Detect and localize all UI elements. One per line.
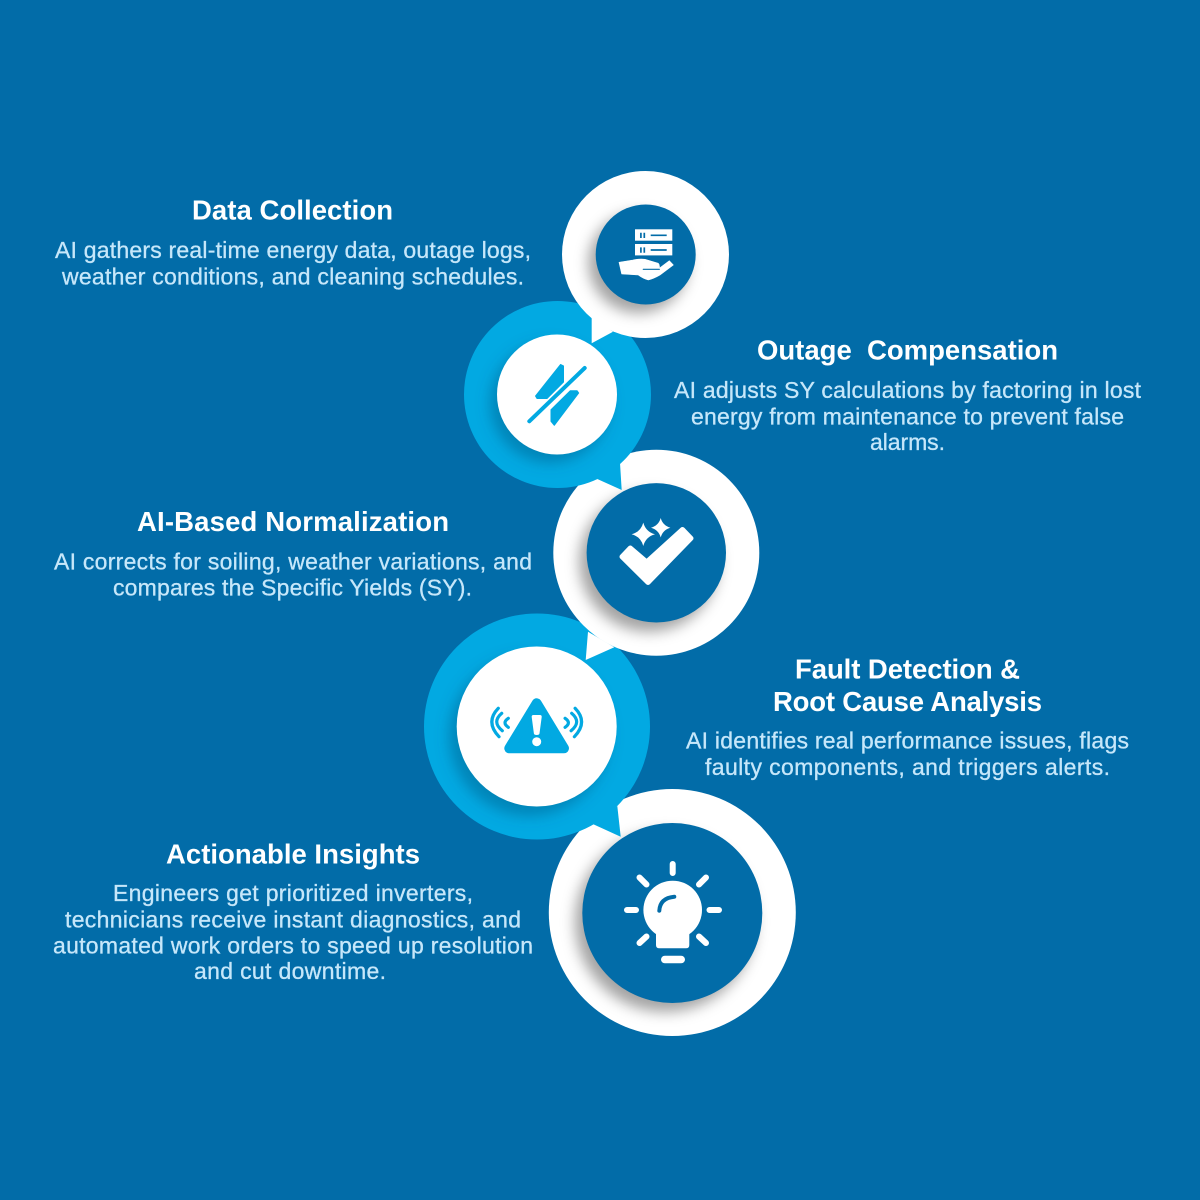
body: AI-based normalization: AI corrects for soiling, weather variations, and	[54, 548, 532, 574]
icon: check mark with sparkles	[622, 518, 691, 582]
speech tail pointing to step 3	[597, 463, 622, 490]
text block: data collection	[55, 194, 531, 289]
text block: AI-based normalization	[54, 506, 532, 601]
step 1 circle: data collection	[562, 171, 729, 343]
body: outage compensation: AI adjusts SY calculations by factoring in lost	[674, 377, 1142, 403]
body: data collection: AI gathers real-time energy data, outage logs,	[55, 237, 531, 263]
body: outage compensation: alarms.	[870, 429, 945, 455]
body: data collection: weather conditions, and cleaning schedules.	[61, 263, 524, 289]
body: fault detection: faulty components, and triggers alerts.	[705, 754, 1110, 780]
heading: fault detection and root cause analysis: Root Cause Analysis	[773, 686, 1042, 717]
heading: fault detection and root cause analysis	[773, 654, 1042, 717]
speech tail pointing to step 4	[586, 632, 614, 660]
speech tail pointing to step 5	[593, 806, 621, 837]
icon: lightning bolt crossed out	[529, 364, 585, 425]
body: AI-based normalization: compares the Specific Yields (SY).	[113, 575, 472, 601]
icon: servers on open hand	[619, 229, 673, 280]
heading: fault detection and root cause analysis: Fault Detection &	[795, 654, 1020, 684]
infographic canvas	[54, 171, 1141, 1036]
step 4 circle: fault detection	[424, 614, 650, 840]
step 3 circle: AI-based normalization	[553, 450, 759, 660]
heading: data collection: Data Collection	[192, 194, 393, 225]
step 5 circle: actionable insights	[549, 789, 796, 1036]
text block: outage compensation	[674, 334, 1142, 455]
heading: outage compensation: Outage Compensation	[757, 334, 1058, 365]
body: fault detection	[686, 728, 1129, 780]
body: fault detection: AI identifies real performance issues, flags	[686, 728, 1129, 754]
icon: light bulb	[627, 864, 719, 963]
body: actionable insights: technicians receive instant diagnostics, and	[65, 907, 521, 933]
body: outage compensation: energy from maintenance to prevent false	[691, 404, 1124, 430]
body: AI-based normalization	[54, 548, 532, 601]
body: actionable insights: and cut downtime.	[194, 958, 386, 984]
text block: fault detection and root cause analysis	[686, 654, 1129, 780]
heading: actionable insights: Actionable Insights	[166, 838, 420, 870]
body: actionable insights	[53, 880, 533, 984]
body: actionable insights: Engineers get prioritized inverters,	[113, 880, 473, 906]
speech tail pointing to step 2	[592, 317, 613, 343]
step 2 circle: outage compensation	[464, 301, 651, 490]
body: actionable insights: automated work orders to speed up resolution	[53, 932, 533, 958]
text block: actionable insights	[53, 838, 533, 984]
icon: alert triangle with signal waves	[492, 703, 582, 748]
body: outage compensation	[674, 377, 1142, 455]
heading: AI-based normalization: AI-Based Normalization	[137, 506, 449, 537]
body: data collection	[55, 237, 531, 289]
